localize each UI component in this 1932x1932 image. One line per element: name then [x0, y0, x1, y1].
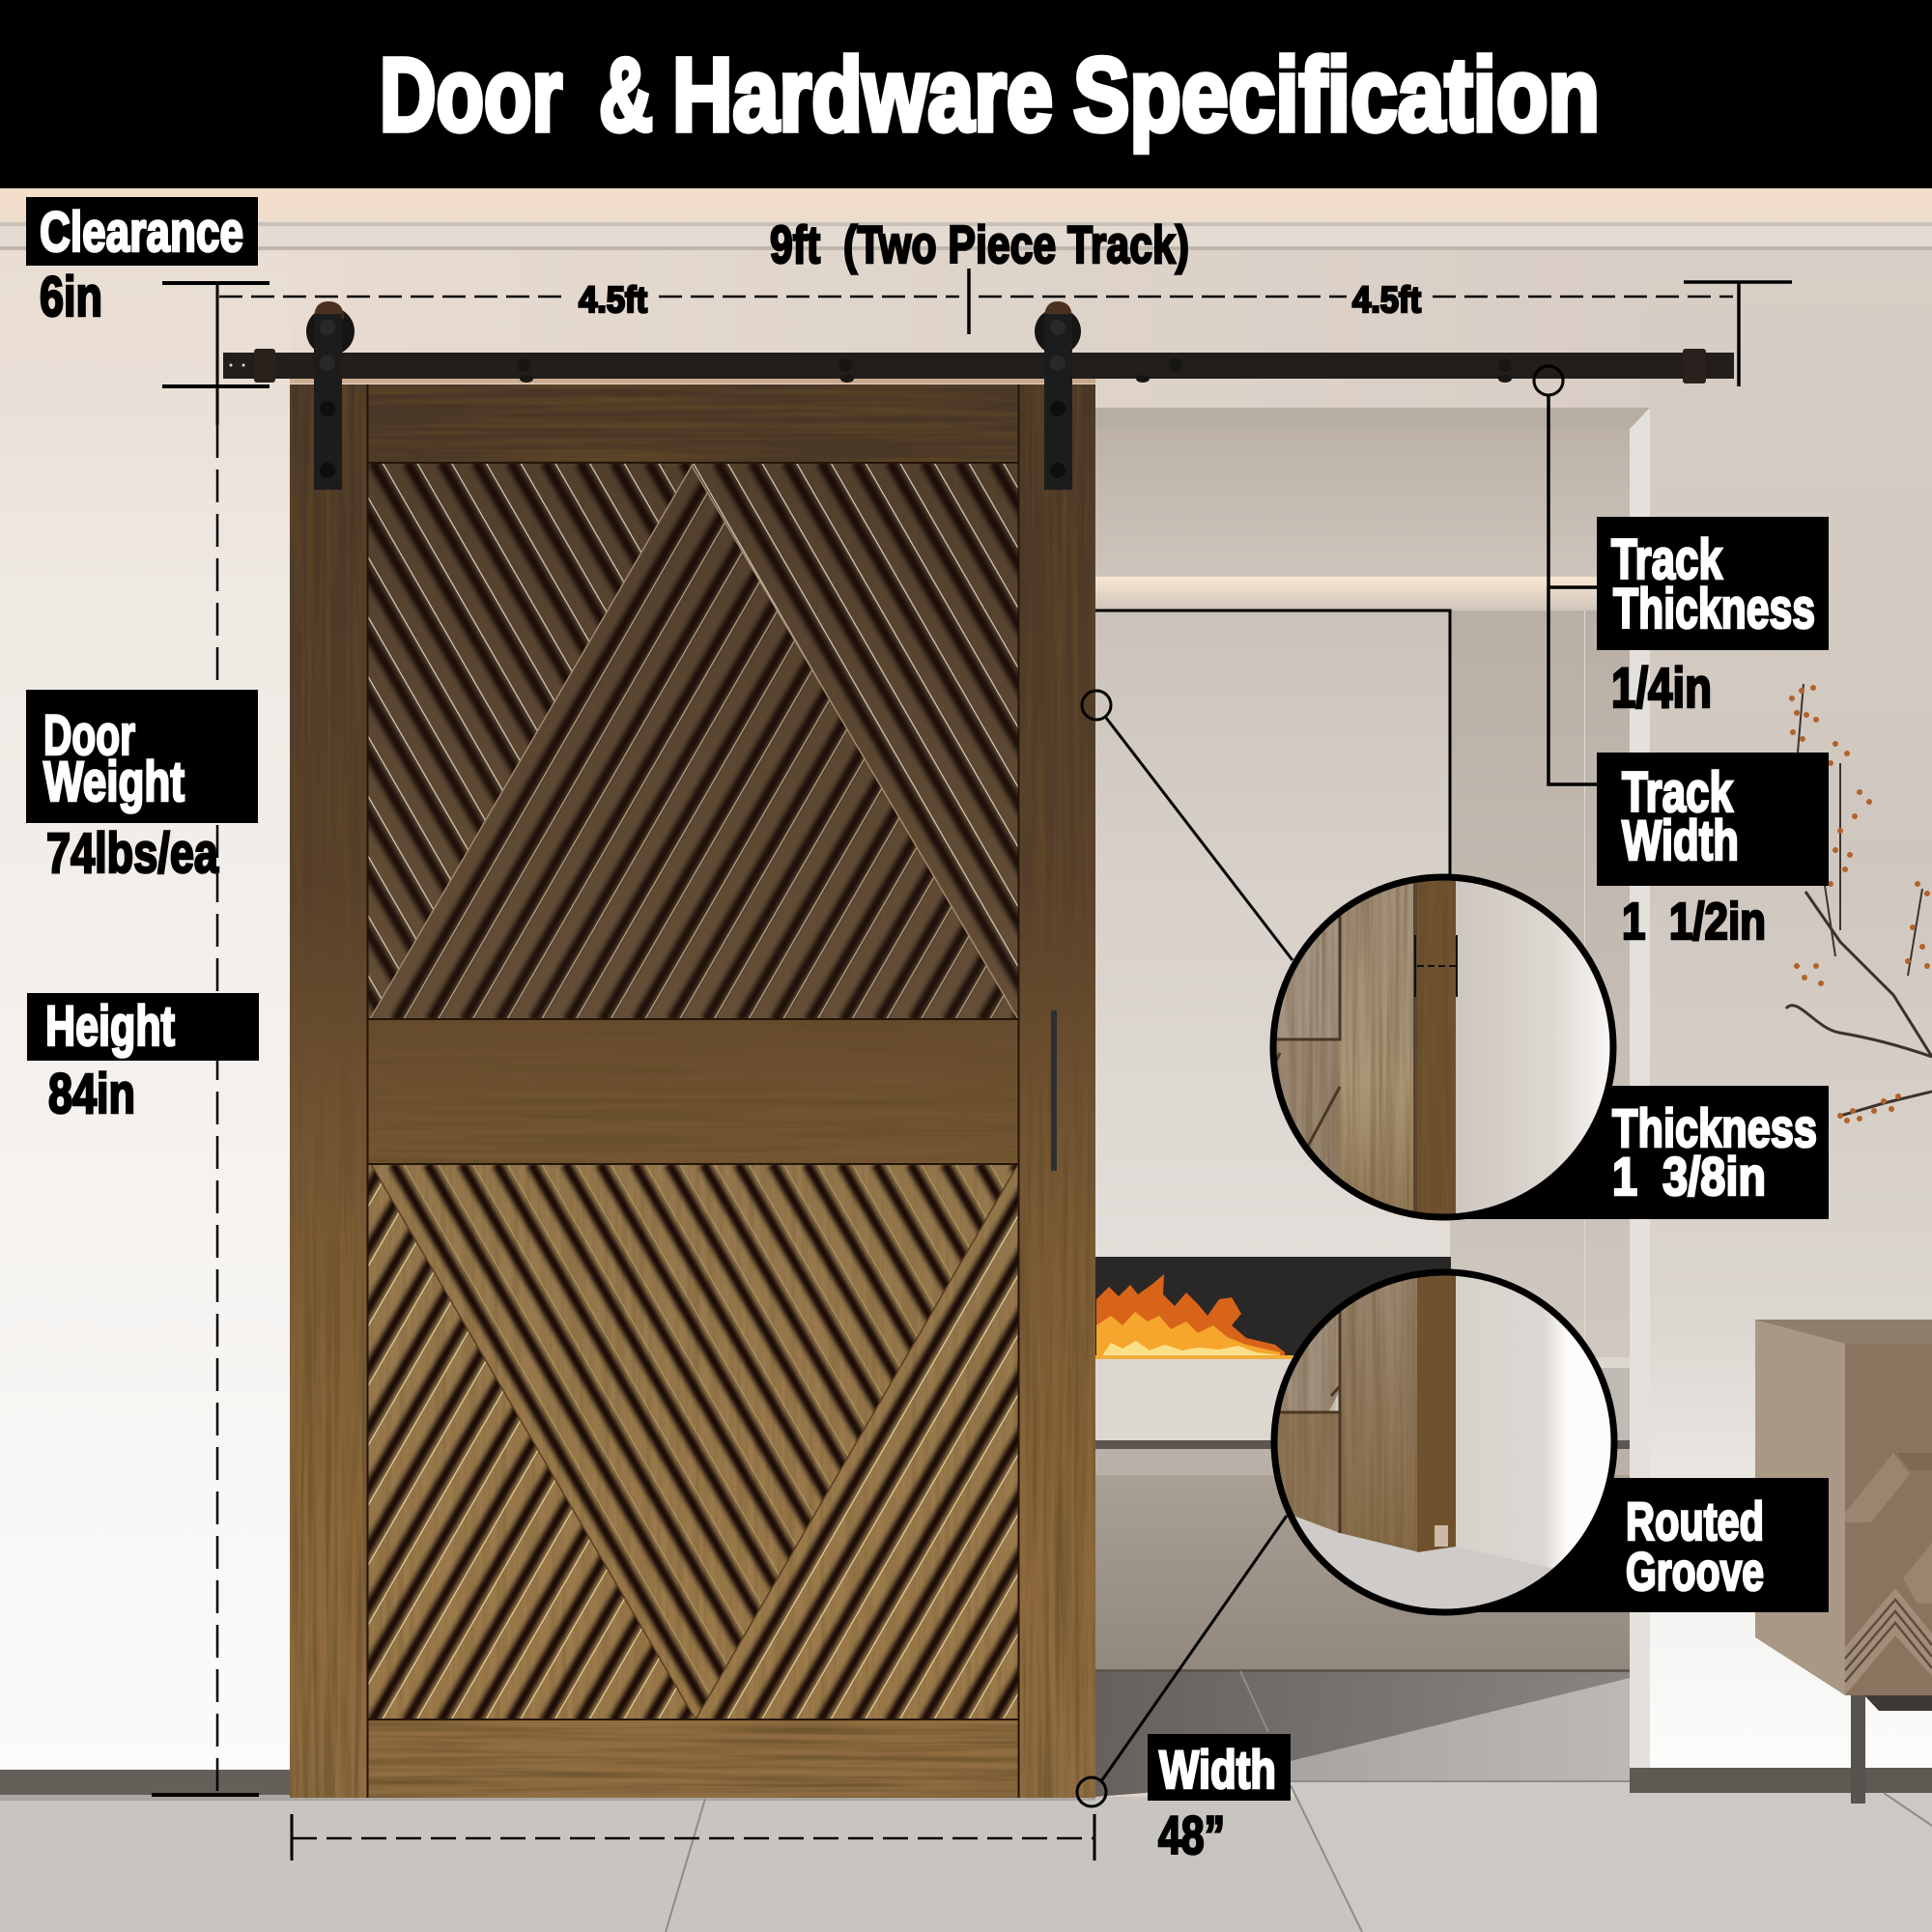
track bolts [517, 358, 1512, 383]
door weight label: Weight [43, 751, 185, 813]
track length dimension: 9ft (Two Piece Track) [770, 214, 1189, 274]
track length dimension: 4.5ft [1352, 280, 1421, 321]
sliding track [223, 349, 1734, 384]
track length dimension: 4.5ft [579, 280, 647, 321]
width label [1148, 1734, 1291, 1865]
flames [1095, 1274, 1337, 1359]
title: Specification [1073, 36, 1600, 153]
barn door [290, 384, 1095, 1798]
lower diagonal panel [369, 1165, 1018, 1721]
track length dimension [219, 214, 1792, 386]
track thickness label: Track [1611, 528, 1723, 591]
baseboards [0, 1768, 1932, 1797]
track stoppers [254, 349, 1706, 384]
upper diagonal panel [369, 464, 1018, 1018]
clearance label: Clearance [40, 201, 243, 264]
sofa and far floor [1095, 1475, 1630, 1797]
rails and stiles grain [290, 384, 1095, 1798]
thickness label box [1449, 1086, 1829, 1219]
chevron ribs [1845, 1588, 1932, 1695]
track callout lines [1534, 366, 1597, 784]
title bar [0, 0, 1932, 188]
doorway opening [1095, 408, 1650, 1779]
clearance label [26, 197, 258, 328]
height label [27, 993, 259, 1125]
door thickness callout connectors [1082, 611, 1450, 960]
detail circle: door thickness [1270, 874, 1618, 1222]
left hanger [306, 301, 355, 490]
track thickness label: 1/4in [1611, 657, 1712, 720]
routed groove label box: Groove [1626, 1541, 1764, 1602]
width label: 48” [1158, 1804, 1225, 1865]
height label: 84in [48, 1063, 135, 1125]
track width label: Width [1622, 810, 1739, 872]
title: & [599, 36, 653, 153]
thickness label box: 1 3/8in [1612, 1146, 1766, 1207]
title [380, 36, 1600, 153]
door weight label [26, 690, 258, 885]
clearance and height dimension line [152, 283, 270, 1795]
decorative branch [1786, 684, 1932, 1121]
width callout connector [1077, 1516, 1287, 1806]
right hanger [1035, 301, 1081, 490]
door handle [1051, 1010, 1057, 1171]
routed groove label box [1449, 1478, 1829, 1612]
width label: Width [1159, 1739, 1276, 1800]
detail circle: routed groove [1270, 1270, 1618, 1623]
floor [0, 1671, 1932, 1932]
height label: Height [45, 995, 175, 1058]
routed groove label box: Routed [1626, 1491, 1764, 1551]
clearance label: 6in [40, 266, 102, 328]
title: Door [380, 36, 562, 153]
door weight label: 74lbs/ea [46, 822, 219, 885]
fireplace [1095, 1257, 1630, 1475]
track thickness label [1597, 517, 1829, 720]
track width label: Track [1622, 761, 1734, 824]
door weight label: Door [43, 704, 135, 767]
sideboard cabinet [1755, 1320, 1932, 1804]
thickness label box: Thickness [1612, 1097, 1817, 1158]
track width label [1597, 753, 1829, 951]
title: Hardware [672, 36, 1053, 153]
track width label: 1 1/2in [1622, 893, 1766, 951]
door width dimension [292, 1814, 1094, 1861]
track thickness label: Thickness [1613, 578, 1815, 640]
